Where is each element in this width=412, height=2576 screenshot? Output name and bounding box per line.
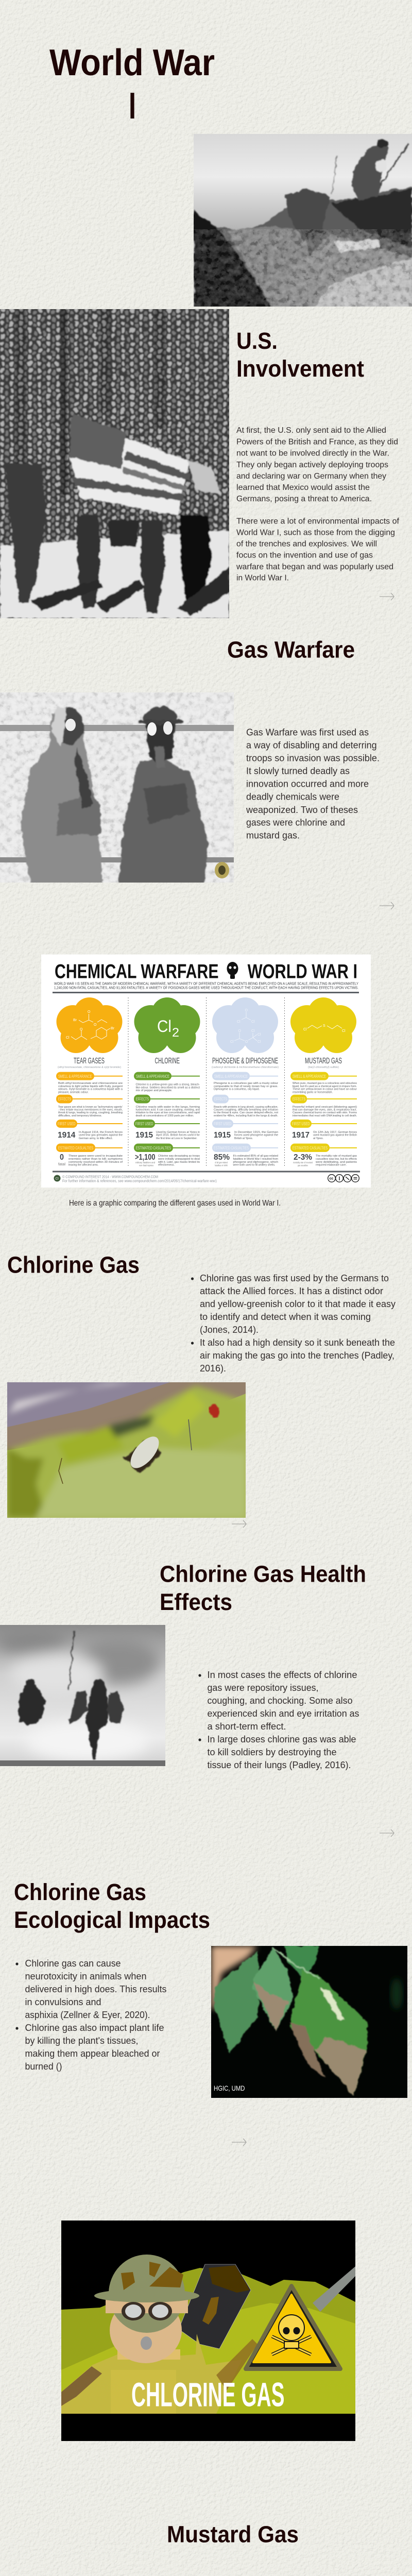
text block: U.S. involvement: At first, the U.S. only sent aid to the Allied: [236, 426, 386, 435]
flower: mustard gas: [290, 997, 356, 1053]
column: tear gases: 0: [60, 1153, 64, 1162]
text block: chlorine ecological impacts: by killing the plant's tissues,: [25, 2036, 138, 2046]
column: tear gases: odours. Xylyl bromide is a colourless liquid with a: [58, 1088, 123, 1091]
column: phosgene and diphosgene: forces used phosgene against the: [234, 1134, 278, 1137]
column: chlorine: April 1915. British forces used it for: [156, 1134, 200, 1137]
text block: gas warfare: gases were chlorine and: [246, 818, 345, 828]
column: chlorine: irritation to the eyes at low concentrations, and rapid: [136, 1111, 200, 1114]
text block: chlorine gas bullets: Chlorine gas was first used by the Germans to: [200, 1273, 389, 1283]
text block: gas warfare: weaponized. Two of theses: [246, 805, 358, 815]
chart intro text: [54, 981, 358, 990]
column: mustard gas: 2-3%: [294, 1153, 312, 1162]
text block: gas warfare: innovation occurred and more: [246, 779, 369, 789]
details: mustard gas: FIRST USED: [292, 1122, 310, 1126]
chart title: WORLD WAR I: [248, 960, 357, 983]
column: mustard gas: were debilitating, and patients: [315, 1161, 357, 1164]
column: phosgene and diphosgene: phosgene and diphosgene, which: [233, 1161, 278, 1164]
column: mustard gas: Powerful irritant and vesicant (blistering agent): [293, 1106, 357, 1109]
text block: U.S. involvement: learned that Mexico would assist the: [236, 483, 370, 492]
column: mustard gas: mortality rate of mustard: [293, 1161, 313, 1164]
column: phosgene and diphosgene: of all gas-related: [215, 1161, 228, 1164]
text block: chlorine health effects: a short-term effect.: [207, 1721, 286, 1732]
column: tear gases: 1914: [58, 1131, 75, 1140]
icons: creative commons licence: cc: [330, 1177, 333, 1181]
text block: chlorine health effects: [198, 1670, 359, 1770]
column: phosgene and diphosgene: Phosgene is a colourless gas with a musty odour: [214, 1082, 278, 1085]
chart intro text: WORLD WAR I IS SEEN AS THE DAWN OF MODERN CHEMICAL WARFARE, WITH A VARIETY OF DIFFERENT CHEMICAL AGENTS BEING EMPLOYED ON A LARGE SCALE, RESULTING IN APPROXIMATELY: [54, 981, 358, 986]
text block: chlorine gas bullets: attack the Allied forces. It has a distinct odor: [200, 1286, 383, 1296]
text block: chlorine ecological impacts: Chlorine gas also impact plant life: [25, 2023, 164, 2033]
column: chlorine: like odour. Soldiers described its smell as a distinct: [136, 1086, 200, 1089]
column: tear gases: difficulties, and temporary blindness.: [58, 1114, 102, 1117]
heading: U.S. Involvement: U.S.: [236, 328, 278, 354]
illustration: soldier: [61, 2255, 258, 2414]
caption: Here is a graphic comparing the different gases used in World War I.: [69, 1199, 281, 1208]
details: tear gases: ESTIMATED CASUALTIES: [58, 1146, 93, 1150]
column: chlorine: [134, 997, 200, 1166]
column: mustard gas: used mustard gas against the British: [313, 1134, 357, 1137]
text block: chlorine gas bullets: 2016).: [200, 1363, 226, 1374]
photo: two soldiers in gas masks: [0, 692, 234, 883]
text block: chlorine ecological impacts: Chlorine gas can cause: [25, 1958, 121, 1969]
heading: Chlorine Gas Ecological Impacts: Ecological Impacts: [14, 1907, 210, 1933]
name: chlorine: CHLORINE: [154, 1057, 180, 1065]
column: chlorine: non-fatal injuries: [139, 1164, 154, 1166]
column: chlorine: the first time at Loos in September.: [156, 1137, 197, 1140]
details: phosgene: FIRST USED: [214, 1122, 232, 1126]
details: chlorine: SMELL & APPEARANCE: [136, 1074, 169, 1079]
column: tear gases: (ethyl bromoacetate, chloroacetone & xylyl bromide): [58, 1066, 121, 1069]
flower: phosgene: O: [245, 1009, 248, 1012]
flower: phosgene: Cl: [251, 1020, 255, 1024]
column: phosgene and diphosgene: Causes coughing, difficulty breathing and irritation: [214, 1109, 278, 1112]
column: phosgene and diphosgene: fatalities in WWI: [215, 1164, 228, 1166]
column: mustard gas: at Ypres.: [313, 1137, 323, 1140]
flower: tear gases: [57, 997, 123, 1053]
text block: chlorine ecological impacts: making them appear bleached or: [25, 2048, 160, 2059]
column: mustard gas: When pure, mustard gas is a colourless and odourless: [293, 1082, 357, 1085]
column: tear gases: leaving the affected area.: [68, 1163, 98, 1166]
text block: U.S. involvement: of the trenches and explosives. We will: [236, 539, 377, 548]
details: chlorine: [134, 1072, 200, 1152]
text block: chlorine ecological impacts: [15, 1958, 167, 2072]
column: tear gases: - they irritate mucous membranes in the eyes, mouth,: [58, 1109, 123, 1112]
details: chlorine: EFFECTS: [136, 1097, 149, 1101]
details: chlorine: ESTIMATED CASUALTIES: [136, 1146, 171, 1150]
column: mustard gas: These are yellow-brown in colour and have an odour: [293, 1088, 357, 1091]
heading: Chlorine Gas Health Effects: [160, 1561, 366, 1615]
column: mustard gas: resembling garlic or horseradish.: [293, 1091, 333, 1094]
column: tear gases: Tear gases are what is known as 'lachrymatory agents': [58, 1106, 123, 1109]
heading: Chlorine Gas: Chlorine Gas: [7, 1252, 140, 1278]
arrow: [232, 1520, 246, 1528]
photo: soldiers running through smoke: [0, 1625, 165, 1766]
text block: chlorine gas bullets: [191, 1273, 396, 1374]
details: tear gases: [56, 1072, 123, 1152]
details: phosgene: ESTIMATED CASUALTIES: [214, 1146, 249, 1150]
column: tear gases: In August 1914, the French forces: [79, 1131, 123, 1134]
column: chlorine: effectiveness.: [158, 1163, 175, 1166]
flower: tear gases: Cl: [66, 1036, 70, 1040]
illustration: soldier and chlorine gas warning sign: [61, 2221, 355, 2441]
flower: mustard gas: Cl: [303, 1028, 307, 1031]
column: tear gases: German army, to little effect.: [79, 1137, 113, 1140]
flower: phosgene: O: [245, 1040, 248, 1044]
chart credits: Cl: [56, 1177, 59, 1181]
heading: Chlorine Gas Health Effects: Effects: [160, 1589, 232, 1615]
flower: phosgene: Cl: [237, 1020, 241, 1024]
column: chlorine: 1915: [135, 1131, 153, 1140]
heading: U.S. Involvement: [236, 328, 364, 382]
column: phosgene and diphosgene: British at Ypres.: [234, 1137, 253, 1140]
heading: Chlorine Gas Ecological Impacts: [14, 1879, 210, 1933]
text block: gas warfare: deadly chemicals were: [246, 791, 339, 802]
title: [49, 42, 215, 127]
column: chlorine: Chlorine was devastating as troops: [158, 1155, 200, 1158]
column: chlorine: >1,100: [135, 1153, 156, 1162]
column: chlorine: Chlorine is a yellow-green gas with a strong, bleach-: [136, 1083, 200, 1086]
arrow: [380, 1829, 394, 1837]
flower: phosgene: Cl: [258, 1040, 261, 1044]
text block: chlorine ecological impacts: neurotoxicity in animals when: [25, 1971, 146, 1981]
column: phosgene and diphosgene: 85%: [214, 1153, 230, 1162]
column: tear gases: [56, 997, 123, 1166]
text block: chlorine health effects: experienced skin and eye irritation as: [207, 1708, 359, 1719]
flower: phosgene: O: [238, 1029, 241, 1033]
details: mustard gas: EFFECTS: [293, 1097, 305, 1101]
text block: gas warfare: It slowly turned deadly as: [246, 766, 350, 776]
text block: U.S. involvement: warfare that began and was popularly used: [236, 563, 393, 571]
column: mustard gas: Causes chemical burns on contact with skin. Forms: [293, 1111, 357, 1114]
column: tear gases: enemies rather than to kill; symptoms: [68, 1158, 123, 1161]
flower: mustard gas: S: [323, 1024, 325, 1028]
text block: U.S. involvement: [236, 426, 400, 583]
column: phosgene and diphosgene: Reacts with proteins in lung alveoli, causing suffocation.: [214, 1106, 278, 1109]
text block: chlorine health effects: In most cases the effects of chlorine: [207, 1670, 357, 1680]
column: mustard gas: [290, 997, 357, 1166]
arrow: [232, 2139, 246, 2146]
photo: yellow-green chlorine gas cloud around a tank: [7, 1382, 246, 1518]
text block: chlorine health effects: gas were repository issues,: [207, 1683, 318, 1693]
column: chlorine: hydrochloric acid. It can cause coughing, vomiting, and: [136, 1109, 200, 1112]
details: tear gases: EFFECTS: [58, 1097, 71, 1101]
column: tear gases: pleasant, aromatic odour.: [58, 1091, 89, 1094]
heading: Chlorine Gas Ecological Impacts: Chlorine Gas: [14, 1879, 146, 1905]
column: chlorine: military fatalities and: [135, 1161, 155, 1164]
flower: phosgene: Cl: [230, 1040, 234, 1044]
details: mustard gas: SMELL & APPEARANCE: [293, 1074, 326, 1079]
text block: U.S. involvement: focus on the invention and use of gas: [236, 551, 373, 560]
flower: tear gases: Br: [73, 1019, 77, 1022]
details: phosgene: SMELL & APPEARANCE: [214, 1074, 248, 1079]
column: tear gases: Both ethyl bromoacetate and chloroacetone are: [58, 1082, 123, 1085]
column: mustard gas: casualties was low, but its effects: [316, 1158, 357, 1161]
column: phosgene and diphosgene: evident for 48hrs, including fluid in the lungs & death.: [214, 1114, 278, 1117]
text block: chlorine ecological impacts: burned (): [25, 2061, 62, 2072]
details: mustard gas: [290, 1072, 357, 1152]
text block: chlorine ecological impacts: delivered in high does. This results: [25, 1984, 167, 1994]
column: phosgene and diphosgene: 1915: [214, 1131, 231, 1140]
chart intro text: 1,240,000 NON-FATAL CASUALTIES, AND 91,000 FATALITIES. A VARIETY OF POISONOUS GASES WERE USED THROUGHOUT THE CONFLICT, WITH EACH HAVING DIFFERING EFFECTS UPON VICTIMS.: [54, 985, 358, 990]
column: phosgene and diphosgene: comparable to that of newly mown hay or grass.: [214, 1085, 278, 1088]
text block: chlorine gas bullets: (Jones, 2014).: [200, 1325, 259, 1335]
text block: chlorine ecological impacts: asphixia (Zellner & Eyer, 2020).: [25, 2010, 150, 2020]
chart title: [55, 960, 357, 983]
column: chlorine: mix of pepper and pineapple.: [136, 1089, 173, 1092]
column: mustard gas: intermediates that react with DNA leading to cell death.: [293, 1114, 357, 1117]
column: tear gases: colourless to light yellow liquids with fruity, pungent: [58, 1085, 123, 1088]
title: World War: [49, 42, 215, 83]
text block: U.S. involvement: They only began actively deploying troops: [236, 461, 388, 469]
text block: U.S. involvement: Powers of the British and France, as they did: [236, 438, 398, 446]
text block: gas warfare: a way of disabling and deterring: [246, 740, 377, 750]
heading: U.S. Involvement: Involvement: [236, 355, 364, 382]
column: chlorine: death at concentrations of 1000 parts per million.: [136, 1114, 194, 1117]
text block: chlorine ecological impacts: in convulsions and: [25, 1997, 101, 2007]
icons: creative commons licence: [328, 1175, 359, 1182]
flower: phosgene: [212, 997, 278, 1053]
heading: Chlorine Gas Health Effects: Chlorine Gas Health: [160, 1561, 366, 1587]
text block: gas warfare: Gas Warfare was first used as: [246, 727, 369, 737]
heading: Mustard Gas: Mustard Gas: [167, 2521, 299, 2547]
column: mustard gas: (bis(2-chloroethyl) sulfide): [308, 1066, 339, 1069]
text block: U.S. involvement: and declaring war on Germany when they: [236, 472, 386, 481]
column: mustard gas: gas casualties: [298, 1164, 308, 1166]
column: phosgene and diphosgene: [212, 997, 279, 1166]
flower: mustard gas: Cl: [342, 1029, 346, 1033]
flower: phosgene: Cl: [251, 1029, 255, 1033]
photo: troops with the American flag: [0, 309, 229, 618]
details: phosgene: [212, 1072, 278, 1152]
text block: U.S. involvement: not want to be involved directly in the War.: [236, 449, 389, 458]
text block: chlorine gas bullets: It also had a high density so it sunk beneath the: [200, 1337, 395, 1348]
column: mustard gas: 1917: [292, 1131, 310, 1140]
illustration: shovel: [179, 2264, 251, 2349]
column: tear gases: commonly resolved within 30 minutes of: [68, 1161, 123, 1164]
column: phosgene and diphosgene: In December 1915, the German: [234, 1131, 278, 1134]
name: mustard gas: MUSTARD GAS: [305, 1057, 342, 1065]
column: chlorine: with it. Later, gas masks limited its: [158, 1161, 200, 1164]
column: phosgene and diphosgene: Diphosgene is a colourless, oily liquid.: [214, 1088, 260, 1091]
text block: gas warfare: [246, 727, 380, 841]
chart credits: For further information & references, see www.compoundchem.com/2014/05/17/chemical-warfare-ww1: [62, 1180, 217, 1183]
text block: chlorine health effects: tissue of their lungs (Padley, 2016).: [207, 1760, 351, 1770]
details: chlorine: FIRST USED: [135, 1122, 153, 1126]
chart title: CHEMICAL WARFARE: [55, 960, 218, 983]
column: tear gases: fatal: [58, 1163, 65, 1166]
column: phosgene and diphosgene: It's estimated 85% of all gas-related: [233, 1155, 278, 1158]
text block: chlorine gas bullets: to identify and detect when it was coming: [200, 1312, 371, 1322]
column: chlorine: Chlorine reacts with water in the lungs, forming: [136, 1106, 200, 1109]
flower: tear gases: Br: [111, 1027, 115, 1030]
text block: gas warfare: mustard gas.: [246, 831, 300, 841]
column: chlorine: Used by German forces at Ypres in: [156, 1131, 200, 1134]
column: tear gases: used tear gas grenades against the: [79, 1134, 123, 1137]
chart credits: © COMPOUND INTEREST 2014 - WWW.COMPOUNDCHEM.COM: [62, 1175, 158, 1179]
flower: phosgene: Cl: [258, 1033, 261, 1037]
column: tear gases: throat & lungs, leading to crying, coughing, breathing: [58, 1111, 123, 1114]
flower: tear gases: O: [94, 1023, 97, 1027]
chart credits: [54, 1175, 217, 1183]
text block: U.S. involvement: There were a lot of environmental impacts of: [236, 517, 400, 526]
column: phosgene and diphosgene: (carbonyl dichloride & trichloromethane chloroformate): [212, 1066, 279, 1069]
text block: U.S. involvement: in World War I.: [236, 574, 289, 583]
text block: U.S. involvement: World War I, such as those from the digging: [236, 529, 395, 537]
column: mustard gas: that can damage the eyes, skin, & respiratory tract.: [293, 1109, 357, 1112]
column: mustard gas: liquid, but it's used as a chemical agent in impure form.: [293, 1085, 357, 1088]
flower: chlorine: [134, 997, 200, 1053]
column: mustard gas: On 12th July 1917, German forces: [313, 1131, 357, 1134]
name: tear gases: TEAR GASES: [74, 1057, 105, 1065]
details: phosgene: EFFECTS: [214, 1097, 227, 1101]
flower: tear gases: O: [80, 1028, 83, 1031]
photo: leaves damaged by chlorine: HGIC, UMD: [214, 2084, 245, 2092]
text block: chlorine gas bullets: and yellow-greenish color to it that made it easy: [200, 1299, 396, 1309]
column: phosgene and diphosgene: were both used to fill artillery shells.: [233, 1163, 276, 1166]
text block: gas warfare: troops so invasion was possible.: [246, 753, 380, 764]
arrow: [380, 593, 394, 600]
column: mustard gas: The mortality rate of mustard gas: [316, 1155, 357, 1158]
flower: tear gases: O: [88, 1010, 91, 1014]
details: tear gases: FIRST USED: [58, 1122, 76, 1126]
text block: chlorine health effects: to kill soldiers by destroying the: [207, 1747, 337, 1757]
name: phosgene: PHOSGENE & DIPHOSGENE: [212, 1057, 278, 1065]
photo: soldiers climbing out of a trench: [194, 134, 412, 307]
photo: leaves damaged by chlorine: [211, 1946, 407, 2098]
flower: chlorine: Cl: [157, 1017, 171, 1036]
text block: chlorine health effects: In large doses chlorine gas was able: [207, 1734, 356, 1744]
column: chlorine: were initially unequipped to deal: [158, 1158, 200, 1161]
text block: chlorine gas bullets: air making the gas go into the trenches (Padley,: [200, 1350, 394, 1361]
text block: chlorine health effects: coughing, and chocking. Some also: [207, 1696, 352, 1706]
title: I: [129, 86, 136, 127]
column: mustard gas: required elaborate care.: [316, 1163, 347, 1166]
chart: chemical warfare comparison graphic: [41, 955, 371, 1188]
column: phosgene and diphosgene: to the throat & eyes. Can cause delayed effects, not: [214, 1111, 278, 1114]
flower: chlorine: 2: [172, 1026, 179, 1040]
arrow: [380, 902, 394, 909]
column: phosgene and diphosgene: fatalities in World War I resulted from: [233, 1158, 278, 1161]
text block: U.S. involvement: Germans, posing a threat to America.: [236, 495, 372, 503]
icon: skull warning sign: [246, 2286, 340, 2369]
details: tear gases: SMELL & APPEARANCE: [58, 1074, 92, 1079]
column: tear gases: These gases were used to incapacitate: [68, 1155, 123, 1158]
illustration: bayonet: [313, 2266, 355, 2312]
heading: Gas Warfare: Gas Warfare: [227, 637, 355, 663]
details: mustard gas: ESTIMATED CASUALTIES: [293, 1146, 328, 1150]
